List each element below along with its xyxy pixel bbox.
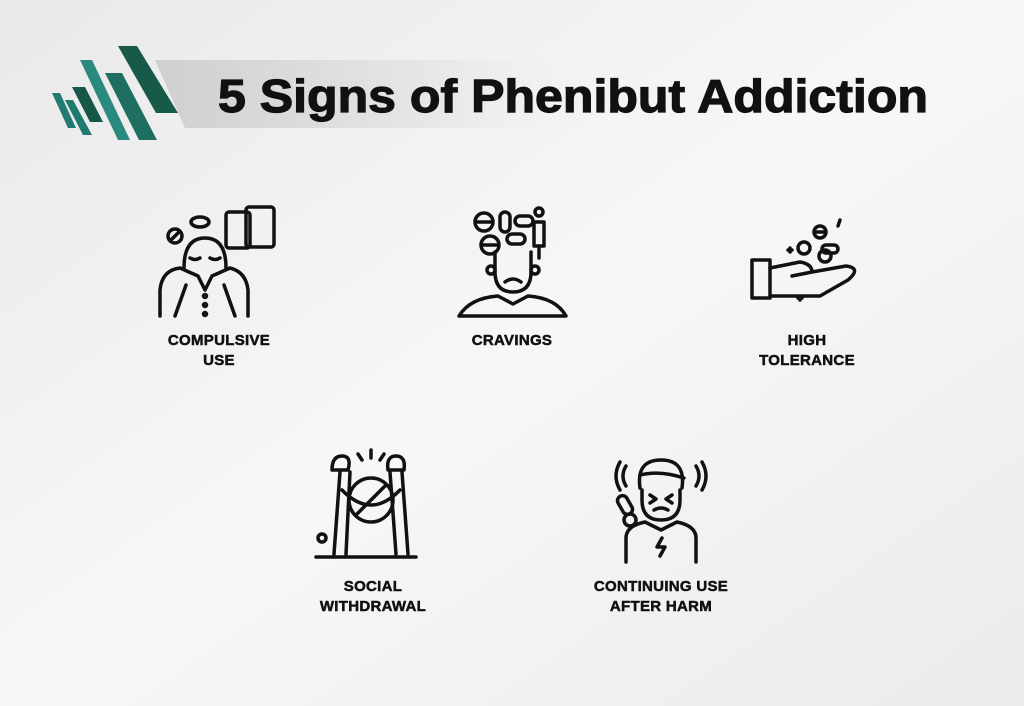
logo [52, 46, 178, 140]
label: social withdrawal [320, 578, 426, 615]
icon: compulsive use [160, 207, 274, 316]
label: compulsive use: USE [203, 352, 235, 369]
label: high tolerance: HIGH [788, 332, 826, 349]
title: 5 Signs of Phenibut Addiction [218, 70, 928, 122]
label: compulsive use: COMPULSIVE [168, 332, 270, 349]
label: continuing use after harm [594, 578, 728, 615]
icon: high tolerance [752, 220, 855, 300]
label: social withdrawal: SOCIAL [344, 578, 402, 595]
label: cravings: CRAVINGS [472, 332, 552, 349]
label: compulsive use [168, 332, 270, 369]
label: social withdrawal: WITHDRAWAL [320, 598, 426, 615]
label: continuing use after harm: AFTER HARM [610, 598, 712, 615]
icon: cravings [459, 208, 566, 316]
label: continuing use after harm: CONTINUING USE [594, 578, 728, 595]
label: high tolerance [759, 332, 855, 369]
title banner [155, 60, 600, 128]
label: high tolerance: TOLERANCE [759, 352, 855, 369]
icon: continuing use after harm [616, 460, 706, 562]
icon: social withdrawal [316, 450, 416, 557]
